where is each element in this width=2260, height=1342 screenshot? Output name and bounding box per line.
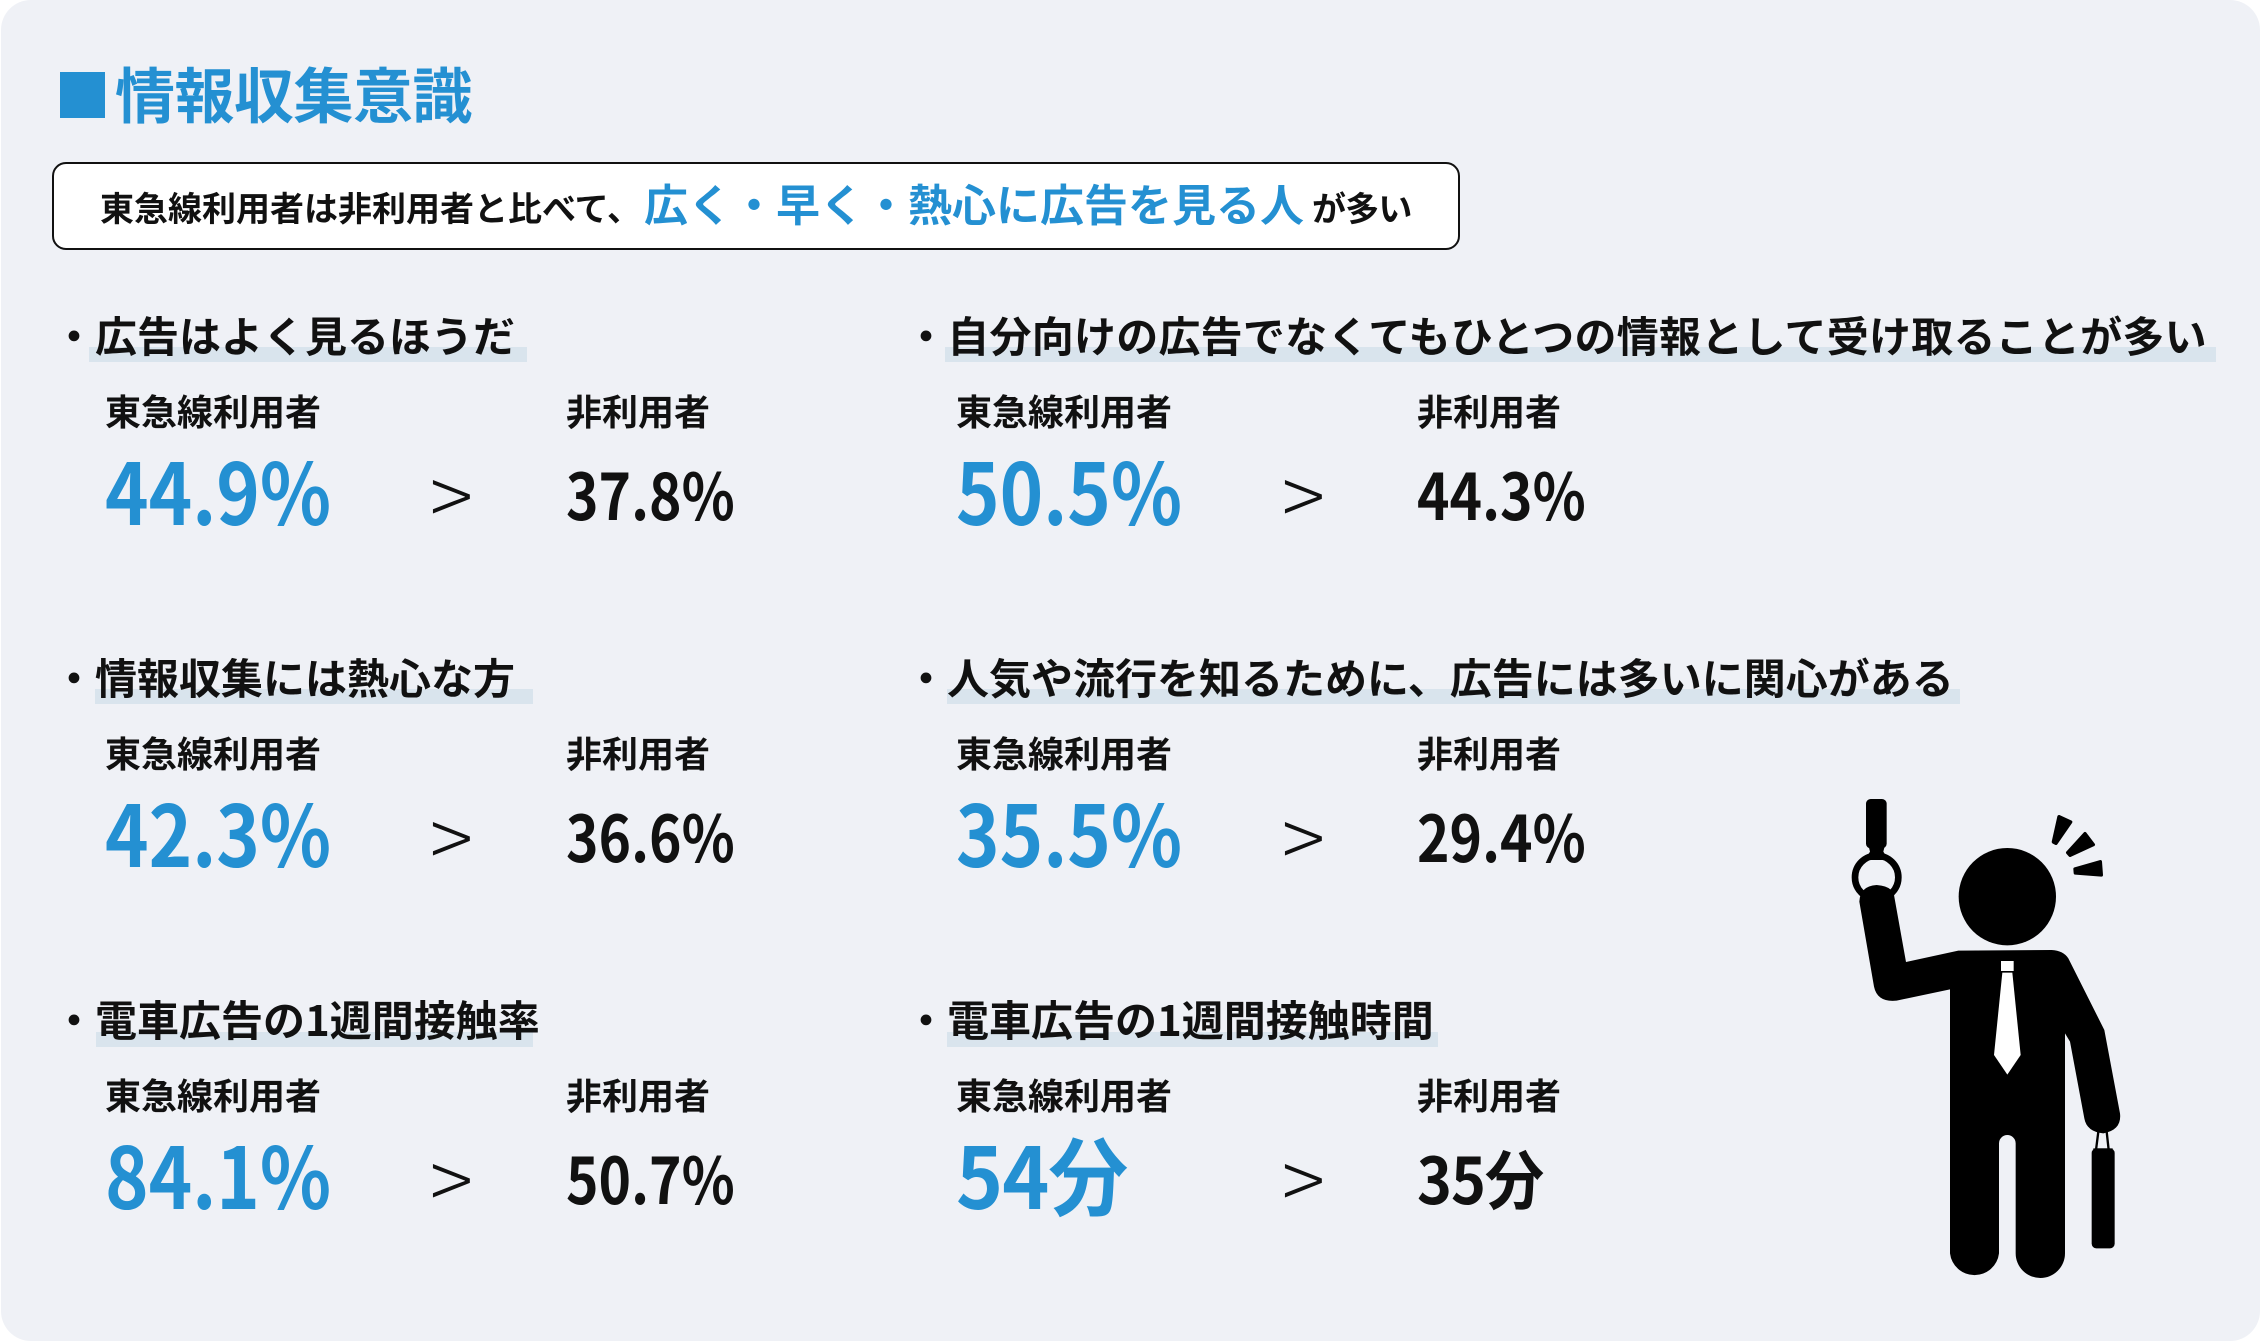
value: users: 50.5% xyxy=(956,427,1182,550)
callout text: 東急線利用者は非利用者と比べて、 xyxy=(100,182,641,231)
heading: ・電車広告の1週間接触時間 xyxy=(905,988,1434,1049)
head xyxy=(1959,848,2056,945)
panel: 自分向けの広告でなくてもひとつの情報として受け取ることが多い xyxy=(905,304,2216,550)
label: users: 東急線利用者 xyxy=(956,384,1172,436)
label: non-users: 非利用者 xyxy=(1417,726,1561,778)
value: non-users: 37.8% xyxy=(566,447,735,539)
panel: 電車広告の1週間接触率 xyxy=(53,988,735,1234)
value: non-users: 29.4% xyxy=(1417,789,1586,881)
comparison arrow: > xyxy=(1282,776,1325,892)
heading: ・情報収集には熱心な方 xyxy=(53,646,515,707)
callout: summary box: 広く・早く・熱心に広告を見る人 xyxy=(644,170,1304,234)
label: non-users: 非利用者 xyxy=(566,726,710,778)
label: users: 東急線利用者 xyxy=(105,726,321,778)
panel: 電車広告の1週間接触時間 xyxy=(905,988,1561,1234)
comparison arrow: > xyxy=(430,1118,473,1234)
icon: businessman holding train strap xyxy=(1852,799,2120,1278)
value: non-users: 44.3% xyxy=(1417,447,1586,539)
value: users: 44.9% xyxy=(105,427,331,550)
panel: 情報収集には熱心な方 xyxy=(53,646,735,892)
panel: 人気や流行を知るために、広告には多いに関心がある xyxy=(905,646,1960,892)
value: users: 42.3% xyxy=(105,769,331,892)
strap xyxy=(1855,799,1898,899)
callout: summary box: が多い xyxy=(1312,182,1412,231)
value: non-users: 35分 xyxy=(1417,1131,1543,1223)
comparison arrow: > xyxy=(1282,434,1325,550)
title: 情報収集意識 xyxy=(115,49,472,136)
label: non-users: 非利用者 xyxy=(566,384,710,436)
comparison arrow: > xyxy=(430,434,473,550)
tie xyxy=(1994,961,2021,1075)
icon: title square xyxy=(60,72,105,118)
heading: ・広告はよく見るほうだ xyxy=(53,304,515,365)
value: users: 84.1% xyxy=(105,1111,331,1234)
label: users: 東急線利用者 xyxy=(956,1068,1172,1120)
heading: ・人気や流行を知るために、広告には多いに関心がある xyxy=(905,646,1954,707)
value: non-users: 50.7% xyxy=(566,1131,735,1223)
label: non-users: 非利用者 xyxy=(1417,1068,1561,1120)
comparison arrow: > xyxy=(430,776,473,892)
label: non-users: 非利用者 xyxy=(1417,384,1561,436)
body xyxy=(1859,885,2120,1278)
value: non-users: 36.6% xyxy=(566,789,735,881)
briefcase xyxy=(2092,1132,2115,1248)
panel: 広告はよく見るほうだ xyxy=(53,304,735,550)
label: users: 東急線利用者 xyxy=(105,1068,321,1120)
label: users: 東急線利用者 xyxy=(956,726,1172,778)
callout: summary box xyxy=(52,162,1460,250)
callout text xyxy=(100,170,1412,234)
label: non-users: 非利用者 xyxy=(566,1068,710,1120)
surprise marks xyxy=(2053,817,2101,875)
heading: ・自分向けの広告でなくてもひとつの情報として受け取ることが多い xyxy=(905,304,2207,365)
value: users: 35.5% xyxy=(956,769,1182,892)
value: users: 54分 xyxy=(956,1111,1127,1234)
heading: ・電車広告の1週間接触率 xyxy=(53,988,540,1049)
label: users: 東急線利用者 xyxy=(105,384,321,436)
comparison arrow: > xyxy=(1282,1118,1325,1234)
